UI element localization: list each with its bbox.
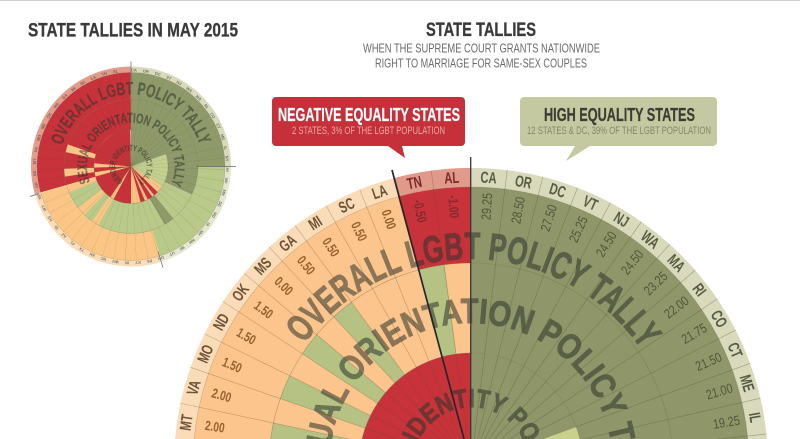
chart: large radial chart bbox=[175, 157, 767, 439]
tally values left: -1.00 bbox=[445, 195, 462, 219]
tally values right: 19.25 bbox=[712, 412, 741, 432]
tally values left: 0.50 bbox=[294, 253, 319, 278]
state labels left: OK bbox=[228, 280, 253, 305]
orientation policy ring bbox=[249, 243, 693, 439]
outer state label ring bbox=[9, 44, 253, 289]
tally values right: 21.00 bbox=[704, 380, 735, 403]
state labels right: DC bbox=[547, 179, 568, 201]
tally values left: 1.50 bbox=[220, 354, 244, 376]
state labels left: SC bbox=[335, 193, 357, 217]
tally values right: 29.25 bbox=[478, 192, 495, 220]
marker lines bbox=[30, 62, 236, 268]
state labels left: MT bbox=[176, 413, 196, 432]
tally values left: 0.00 bbox=[378, 208, 400, 232]
state labels left: VA bbox=[182, 378, 204, 397]
state labels right: WA bbox=[638, 227, 663, 252]
tally values right: 28.50 bbox=[508, 195, 528, 225]
state labels left bbox=[176, 168, 460, 432]
tally values right: 25.25 bbox=[566, 214, 591, 245]
callout: high equality states bbox=[520, 97, 717, 161]
tally values right: 24.50 bbox=[618, 247, 647, 278]
tally values right: 23.25 bbox=[641, 268, 671, 299]
tally values left: 1.50 bbox=[234, 324, 259, 348]
state labels left: AL bbox=[444, 168, 460, 187]
state labels left: TN bbox=[405, 172, 423, 193]
state labels left: LA bbox=[370, 180, 390, 203]
state labels left: GA bbox=[275, 230, 300, 255]
state labels left: MI bbox=[305, 211, 325, 234]
subtitle bbox=[363, 42, 600, 70]
identity ring wedges bbox=[105, 140, 157, 193]
callout: negative equality states: 2 STATES, 3% OF THE LGBT POPULATION bbox=[292, 125, 445, 137]
tally values left: 0.00 bbox=[271, 274, 297, 299]
overall policy ring bbox=[176, 170, 766, 439]
tally values left bbox=[204, 195, 462, 436]
state labels right: OR bbox=[514, 171, 534, 192]
identity policy ring bbox=[399, 393, 543, 439]
state labels right: CT bbox=[724, 340, 747, 361]
state labels right: CO bbox=[707, 307, 732, 331]
tally values right: 24.50 bbox=[593, 229, 620, 260]
state labels right: ME bbox=[736, 372, 759, 394]
state abbreviations ring: CA OR DC VT NJ WA MA RI CO CT ME IL NY HI NV MN DE MD IA NH NM WI UT OH PA KY IN WV NC AK TX FL AZ ID KS WY NE AR SD MT VA MO ND OK MS GA MI SC LA TN AL bbox=[33, 68, 229, 264]
title: state tallies: STATE TALLIES bbox=[426, 19, 536, 41]
tally values left: 0.50 bbox=[319, 235, 343, 260]
state labels left: MO bbox=[193, 342, 217, 366]
callout: high equality states: HIGH EQUALITY STATES bbox=[544, 105, 695, 125]
callout: high equality states: 12 STATES & DC, 39% OF THE LGBT POPULATION bbox=[527, 125, 711, 137]
tally values left: 1.50 bbox=[251, 298, 276, 322]
title: state tallies in May 2015: STATE TALLIES IN MAY 2015 bbox=[28, 20, 238, 42]
state labels right: IL bbox=[745, 411, 765, 424]
state labels right: NJ bbox=[611, 208, 633, 231]
state labels right: MA bbox=[664, 250, 689, 276]
tally values right bbox=[478, 192, 741, 432]
tally values left: 2.00 bbox=[210, 385, 233, 406]
orientation ring wedges bbox=[57, 93, 205, 240]
state labels left: MS bbox=[250, 253, 275, 278]
state labels right: VT bbox=[580, 191, 601, 214]
tally values right: 21.75 bbox=[679, 320, 710, 347]
ring label: gender identity: GENDER IDENTITY POLICY TALLY bbox=[109, 144, 153, 186]
divider line: negative equality boundary bbox=[392, 170, 471, 439]
state labels right: CA bbox=[480, 168, 497, 187]
chart: small radial chart May 2015 bbox=[30, 62, 236, 268]
ring label: overall LGBT policy tally: OVERALL LGBT POLICY TALLY bbox=[287, 232, 664, 344]
tally values left: 2.00 bbox=[204, 417, 226, 436]
tally values right: 21.50 bbox=[693, 349, 724, 374]
state labels left: ND bbox=[209, 310, 233, 333]
subtitle: WHEN THE SUPREME COURT GRANTS NATIONWIDE bbox=[363, 42, 600, 56]
subtitle: RIGHT TO MARRIAGE FOR SAME-SEX COUPLES bbox=[375, 56, 587, 70]
tally values left: -0.50 bbox=[410, 198, 430, 224]
state labels right: RI bbox=[689, 279, 710, 300]
state label ring bbox=[118, 112, 800, 439]
callout: negative equality states: NEGATIVE EQUALITY STATES bbox=[278, 105, 460, 125]
state labels right bbox=[480, 168, 765, 424]
tally values left: 0.50 bbox=[348, 219, 371, 244]
ring label: sexual orientation: SEXUAL ORIENTATION POLICY TALLY bbox=[77, 112, 185, 188]
overall ring wedges bbox=[30, 65, 232, 268]
tally values right: 22.00 bbox=[661, 293, 692, 322]
callout: negative equality states bbox=[272, 97, 465, 158]
ring label: overall: OVERALL LGBT POLICY TALLY bbox=[52, 82, 212, 144]
tally values right: 27.50 bbox=[538, 203, 560, 233]
radial dividers bbox=[175, 171, 471, 439]
divider line: high equality boundary bbox=[470, 157, 472, 439]
